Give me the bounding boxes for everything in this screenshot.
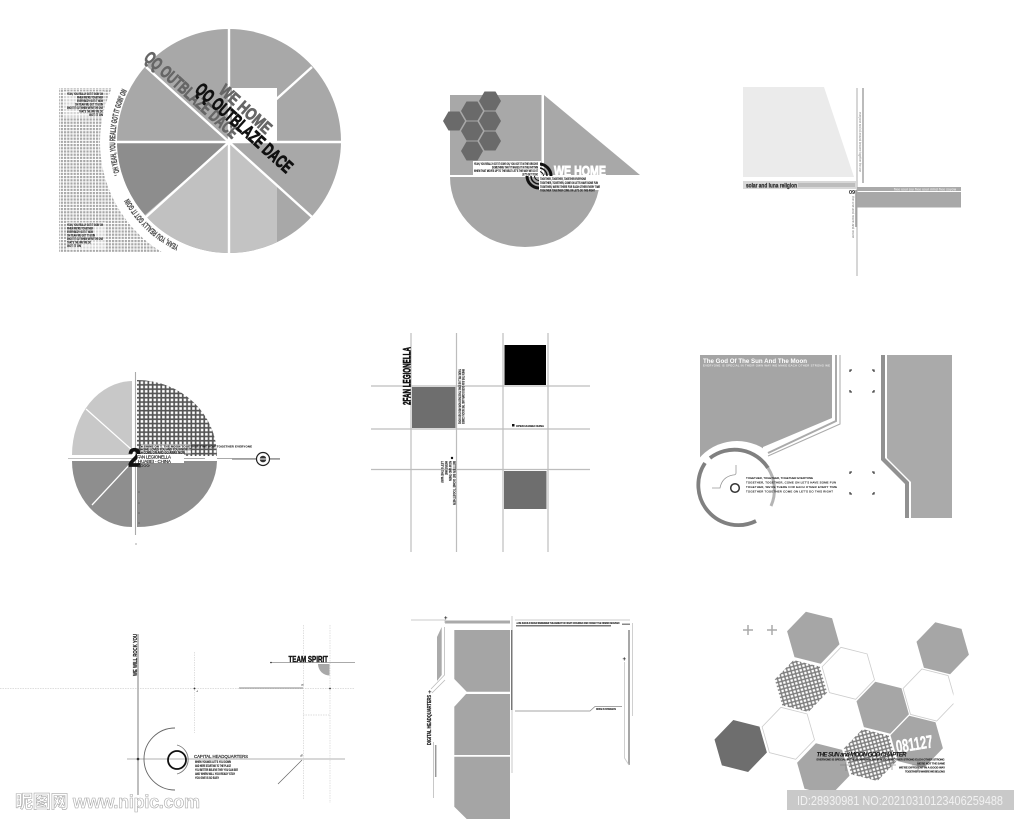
icon: target [256, 452, 270, 466]
crosshairs [840, 759, 925, 771]
panel: hexagons [714, 612, 1014, 810]
vertical heading: 2FAN LEGIONELLA [402, 347, 414, 405]
hexagon outline [762, 707, 814, 759]
vertical text lines lower [440, 457, 456, 505]
text block on dots top: WHEN WE'RE TOGETHER [77, 96, 103, 100]
top bars and rails [445, 620, 510, 624]
block top [454, 630, 510, 692]
guide lines [856, 88, 858, 276]
square dark gray upper [412, 387, 456, 428]
diagonal line and corner marks [197, 684, 303, 784]
hexagon gray [797, 743, 850, 795]
heading: team spirit: TEAM SPIRIT [288, 654, 329, 664]
vertical heading: DIGITAL HEADQUARTERS [427, 694, 433, 745]
heading: THE SUN and MOON GOD CHAPTER [816, 752, 907, 758]
vertical text lines lower: NOW AND THEN [448, 461, 452, 481]
text block left [474, 162, 539, 176]
panel: pie with dotted field [59, 29, 341, 253]
text block: YOU BETTER BELIEVE THEY YOU CAN SEE [195, 768, 238, 772]
corner marks [850, 370, 874, 494]
text block left: WHEN THAT MOVES UP TO THE BEAT LET'S THE WAY WE DO IT [474, 169, 539, 173]
text block right [540, 177, 600, 192]
panel: solar and luna religion [743, 87, 961, 276]
axis ticks [135, 491, 140, 545]
left slanted block [437, 627, 442, 681]
square [450, 95, 542, 175]
label block: FAN LEGIONELLA [137, 454, 172, 460]
vertical text right of square: THERE WILL BE SOME TOGETHER NOW AND EVER MORE [458, 369, 462, 424]
text block: WHEN YOUNGS LET'S YOU DOWN [195, 760, 231, 764]
right block [857, 187, 961, 191]
text block on dots top [64, 91, 104, 117]
hexagon outline [822, 647, 874, 699]
hexagon gray with number [890, 716, 943, 768]
hexagon gray [787, 612, 840, 664]
right polygon [887, 355, 952, 518]
label block: ■ SHE LOVES YOU AND YOU KNOW IT [141, 448, 192, 452]
panel: team spirit [0, 625, 355, 812]
text block right: TOGETHER, WE'RE THERE FOR EACH OTHER EVERY TIME [540, 185, 600, 189]
quadrant: lower-left [72, 461, 132, 527]
quadrant: light upper-left [72, 381, 132, 455]
vertical text lines lower: BETTER BE GONE TOGETHER [452, 461, 456, 505]
plus marks [428, 616, 626, 696]
top text: ■ WE SHOULD NEVER REMEMBER THE BENEFIT OF WHAT OFFENDED AND FORGET THE FRIEND RECEIVED [516, 621, 620, 625]
hexagon cluster [443, 92, 501, 160]
text block: WE'RE DIFFERENT IN A GOOD WAY [899, 766, 945, 770]
vertical text: everyone and all around become together the one [858, 112, 862, 172]
dotted guides [0, 625, 355, 803]
text block: TOGETHER, WE'RE THERE FOR EACH OTHER EVERY TIME [746, 485, 837, 489]
plus marks: + [622, 657, 626, 663]
text block [195, 760, 238, 780]
vertical text right of square: WHEN THE SUN GOES DOWN AND THE MOON COMES [461, 369, 465, 424]
grid lines [371, 333, 590, 552]
icon: inner ring and path [712, 465, 739, 492]
triangle [544, 95, 640, 175]
white disc behind ring [687, 441, 787, 541]
text block [816, 758, 945, 774]
hexagon dark [714, 720, 767, 772]
number 2: 2 [128, 442, 141, 472]
text block: WE'RE NOT THE SAME [917, 762, 945, 766]
block bottom [454, 757, 510, 819]
vertical heading: WE WILL ROCK YOU [133, 634, 139, 676]
hexagon checker [844, 729, 896, 781]
lower vertical text: the one and more and more [851, 196, 855, 238]
hexagon outline [903, 669, 956, 721]
hexagon gray [856, 682, 909, 734]
icon: concentric target [527, 164, 551, 188]
title band [743, 181, 856, 189]
text block: EVERYONE IS SPECIAL IN THEIR OWN WAY WE MAKE EACH OTHER STRONG EACH OTHER STRONG [816, 758, 944, 762]
text block: AND HERE STARTING TO THE PLACE [195, 764, 231, 768]
text block on dots bottom: GOT IT ON [67, 244, 81, 248]
text block right: TOGETHER TOGETHER COME ON LET'S DO THIS RIGHT [540, 188, 596, 192]
divider lines [86, 409, 132, 505]
arcs and ring icon [144, 728, 188, 790]
plus marks: + [444, 616, 448, 622]
text block on dots bottom: WHEN WE'RE TOGETHER [67, 226, 93, 230]
text block on dots top: EVERYBODY GOT IT NOW [77, 99, 103, 103]
text block on dots top: YEAH, YOU REALLY GOT IT GOIN' ON [67, 92, 103, 96]
left rails [431, 627, 445, 693]
connector line [515, 706, 622, 711]
heading: black qq outblaze dace: QQ OUTBLAZE DACE [191, 79, 297, 177]
text block: TOGETHER, TOGETHER, COME ON LET'S HAVE SOME FUN [746, 480, 836, 484]
panel: digital headquarters [411, 616, 632, 819]
title text: solar and luna religion [746, 182, 797, 190]
id watermark band [787, 790, 1014, 810]
text block on dots bottom: OH YEAH WE GOT IT GOIN [67, 234, 95, 238]
main axes [137, 634, 139, 795]
lower rails [432, 742, 434, 798]
vertical text lines lower: HERE WE [444, 461, 448, 476]
text block [746, 476, 837, 494]
pie chart sectors [117, 29, 341, 254]
square dark gray lower [504, 471, 546, 509]
text block left: SOMETHING THAT IT MAKES IT IN THE RHYTHM [492, 166, 538, 170]
label: DRIVE IN STRENGTH [596, 707, 616, 711]
ring segments [698, 450, 774, 525]
text block: TOGETHER, TOGETHER, TOGETHER EVERYONE [746, 476, 813, 480]
label block: HUABEI - CHINA [138, 459, 172, 464]
quadrant: checker [137, 380, 217, 456]
panel: grid with squares [371, 333, 590, 552]
text block left: LET'S GET TOGO [522, 172, 538, 176]
text block on dots bottom: THAT'S THE WAY WE DO [67, 240, 91, 244]
trapezoid [743, 87, 854, 177]
text block left: YEAH, YOU REALLY GOT IT GOIN' ON, YOU GOT IT IN THE GROOVE [474, 162, 538, 166]
plus marks: + [428, 690, 432, 696]
watermark: 昵图网 www.nipic.com [15, 792, 200, 812]
white text strips [473, 161, 602, 190]
text block: TOGETHER'S WHERE WE BELONG [905, 770, 945, 774]
plus icons [743, 625, 777, 635]
text block on dots top: OH YEAH WE GOT IT GOIN [75, 102, 103, 106]
text block: AND WHEN WILL YOU READY STAY [195, 772, 236, 776]
heading: gray qq outblaze dace: QQ OUTBLAZE DACE [140, 48, 242, 142]
subtitle: EVERYONE IS SPECIAL IN THEIR OWN WAY WE MAKE EACH OTHER STRONG WE [703, 364, 830, 368]
label block [137, 444, 252, 470]
heading: we home: WE HOME [215, 81, 276, 138]
dotted background field [59, 88, 169, 252]
panel: quadrant pie [68, 372, 280, 545]
main polygon [700, 355, 832, 465]
text block on dots top: GOT IT ON [89, 113, 103, 117]
title: The God Of The Sun And The Moon [703, 358, 807, 365]
number 09: 09 [849, 190, 855, 196]
label block: ■>>> [138, 464, 150, 470]
number 081127: 081127 [894, 731, 934, 757]
vertical text lines lower: LET'S THE WAY [440, 461, 444, 484]
right rails [628, 630, 630, 765]
label block: ■ COME ON AND GO AWAY NOW [141, 450, 186, 454]
text block right: TOGETHER, TOGETHER, TOGETHER EVERYONE [540, 177, 586, 181]
stripe lines [768, 355, 836, 453]
label block: ■ SHINE ON T. THE MOON TOGETHER TIME NOW TOGETHER EVERYONE [141, 444, 252, 448]
dark stripe [881, 355, 909, 518]
panel: solar and luna religion: free your joy free your mind free soyow [894, 188, 957, 192]
heading: we home: WE HOME [554, 164, 606, 180]
text block on dots bottom [66, 222, 106, 250]
hexagon checker [775, 660, 827, 712]
dots [137, 662, 331, 760]
curved text left: ' OH YEAH, YOU REALLY GOT IT GOIN' ON [109, 88, 128, 176]
text block on dots top: SHOUT IT OUT WHEN WE'RE THE ONE [67, 106, 103, 110]
text block on dots bottom: EVERYBODY GOT IT NOW [67, 230, 93, 234]
text block: TOGETHER TOGETHER COME ON LET'S DO THIS RIGHT [746, 490, 833, 494]
block middle [454, 694, 510, 755]
hexagon gray [916, 622, 969, 674]
semicircle [450, 177, 600, 247]
curved text bottom: YEAH, YOU REALLY GOT IT GOIN [124, 198, 178, 251]
quarter disc [318, 664, 330, 676]
capital headquarters: CAPITAL HEADQUARTERS [194, 754, 248, 759]
panel: hexagons square triangle semicircle [443, 92, 640, 247]
vertical text right of square [458, 369, 465, 424]
text block on dots top: THAT'S THE WAY WE DO [79, 110, 103, 114]
open label: OPEN HUABEI CHINA [516, 424, 544, 428]
text block on dots bottom: SHOUT IT OUT WHEN WE'RE THE ONE [67, 237, 103, 241]
text block right: TOGETHER, TOGETHER, COME ON LET'S HAVE SOME FUN [540, 181, 598, 185]
text block on dots bottom: YEAH, YOU REALLY GOT IT GOIN' ON [67, 223, 103, 227]
panel: god of sun and moon [687, 355, 952, 541]
square black [504, 345, 546, 385]
quadrant: lower-right [137, 461, 217, 527]
text block: YOU GIVE IS SO EASY [195, 776, 219, 780]
